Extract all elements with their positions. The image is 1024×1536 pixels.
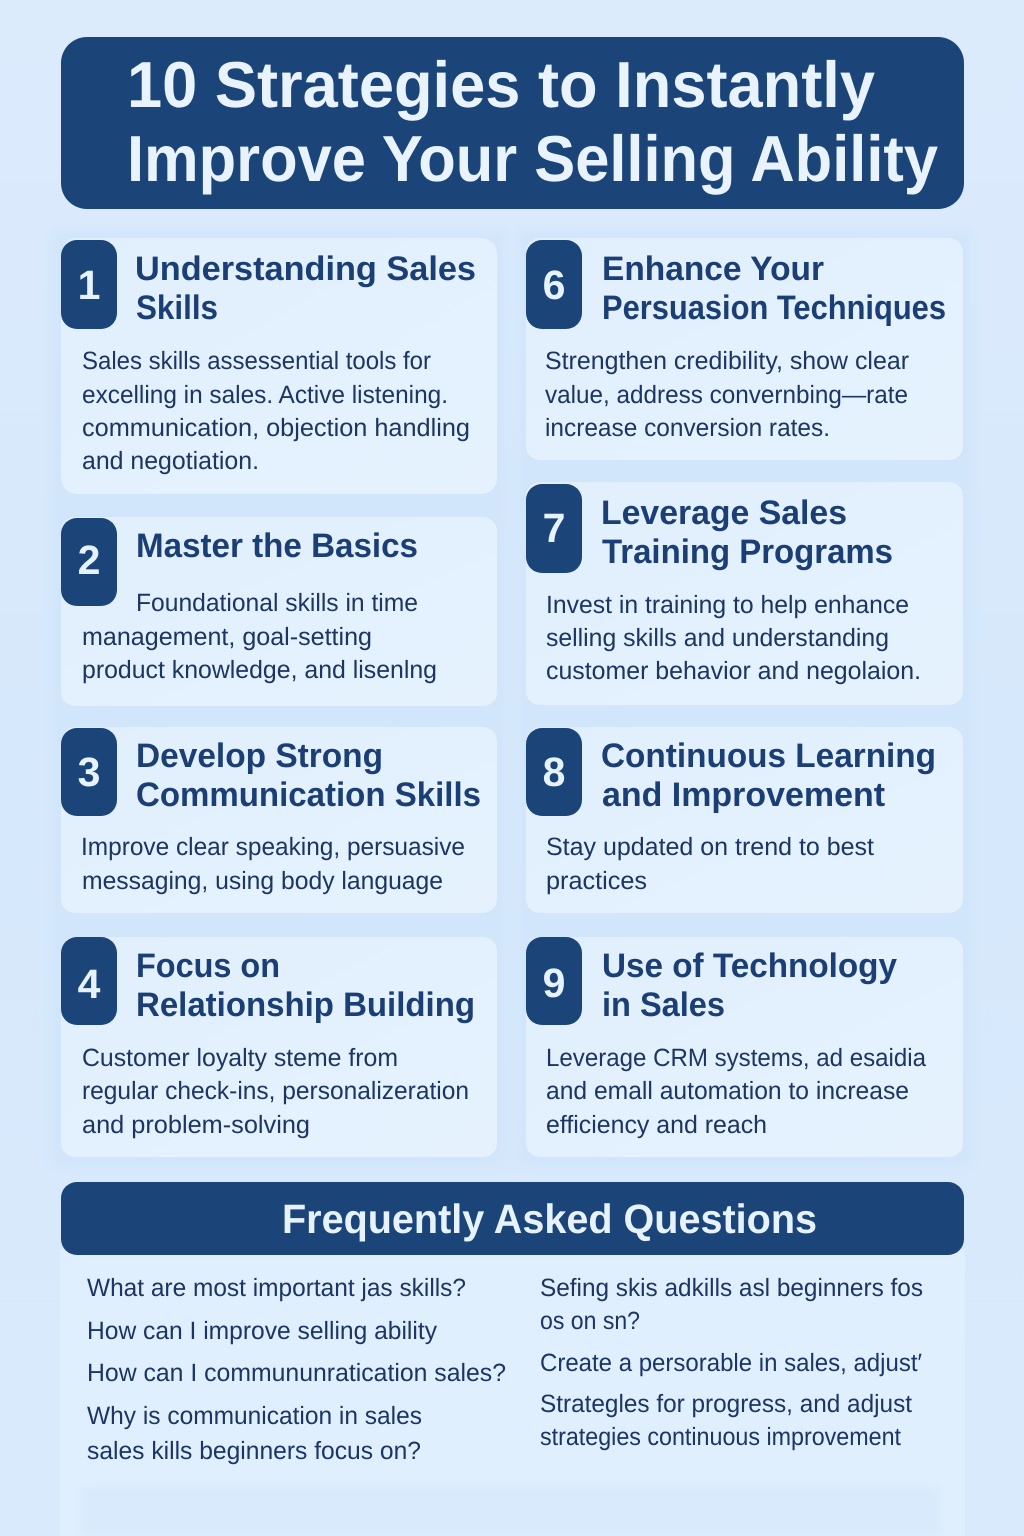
heading: strategy 9: Use of Technology [602,947,897,985]
panel: strategy 6 [526,238,963,460]
badge: number 3 [61,728,117,816]
text: strategy 1: excelling in sales. Active listening. [82,381,448,409]
FAQ questions [87,1274,506,1465]
heading: strategy 9: in Sales [602,986,725,1024]
text: strategy 6: value, address convernbing—rate [545,381,908,409]
panel: strategy 2 [61,517,497,706]
heading: strategy 9 [602,947,897,1024]
title: Improve Your Selling Ability [127,122,938,195]
text: strategy 7: Invest in training to help enhance [546,591,909,619]
text: strategy 7: selling skills and understanding [546,624,889,652]
text: strategy 9: efficiency and reach [546,1111,767,1139]
text: strategy 8: Stay updated on trend to best [546,833,874,861]
heading: strategy 3: Communication Skills [136,776,481,814]
heading: strategy 3: Develop Strong [136,737,383,775]
text: strategy 2: management, goal-setting [82,623,372,651]
heading: strategy 1 [135,250,476,327]
text: strategy 8 [546,833,874,895]
heading: strategy 4: Focus on [136,947,280,985]
text: strategy 2: Foundational skills in time [136,589,418,617]
badge: number 1: 1 [78,262,100,308]
heading: strategy 1: Skills [136,289,218,327]
FAQ answers [540,1274,923,1451]
heading: strategy 7: Training Programs [602,533,893,571]
text: strategy 1 [82,347,470,475]
FAQ answers: strategies continuous improvement [540,1423,901,1451]
title banner [61,37,964,209]
FAQ questions: What are most important jas skills? [87,1274,466,1302]
panel: strategy 3 [61,727,497,913]
text: strategy 2: product knowledge, and lisenlng [82,656,437,684]
badge: number 6 [526,240,582,329]
text: strategy 6 [545,347,909,442]
FAQ questions: How can I improve selling ability [87,1317,437,1345]
text: strategy 6: Strengthen credibility, show clear [545,347,909,375]
heading: strategy 6: Enhance Your [602,250,824,288]
badge: number 1 [61,240,117,329]
FAQ answers: Create a persorable in sales, adjust′ [540,1349,922,1377]
heading: strategy 4 [136,947,475,1024]
text: strategy 3: messaging, using body language [82,867,443,895]
heading: strategy 6 [602,250,946,327]
text: strategy 9: and emall automation to increase [546,1077,909,1105]
heading: strategy 8: Continuous Learning [601,737,936,775]
FAQ header bar [61,1182,964,1255]
heading: strategy 6: Persuasion Techniques [602,289,946,327]
heading: strategy 7 [601,494,893,571]
badge: number 3: 3 [78,749,100,795]
badge: number 9 [526,937,582,1025]
FAQ heading: Frequently Asked Questions [282,1196,817,1242]
badge: number 7: 7 [543,505,565,551]
panel: strategy 9 [526,937,963,1157]
text: strategy 2 [82,589,437,684]
text: strategy 1: communication, objection handling [82,414,470,442]
panel: strategy 4 [61,937,497,1157]
badge: number 8 [526,728,582,816]
text: strategy 1: and negotiation. [82,447,259,475]
text: strategy 7: customer behavior and negolaion. [546,657,921,685]
text: strategy 1: Sales skills assessential tools for [82,347,431,375]
badge: number 6: 6 [543,262,565,308]
panel: strategy 1 [61,238,497,494]
heading: strategy 8: and Improvement [602,776,885,814]
title: 10 Strategies to Instantly [127,48,875,121]
badge: number 2: 2 [78,537,100,583]
FAQ answers: Sefing skis adkills asl beginners fos [540,1274,923,1302]
heading: strategy 1: Understanding Sales [135,250,476,288]
FAQ questions: sales kills beginners focus on? [87,1437,421,1465]
text: strategy 9: Leverage CRM systems, ad esaidia [546,1044,926,1072]
panel: strategy 8 [526,727,963,913]
text: strategy 8: practices [546,867,647,895]
text: strategy 3: Improve clear speaking, persuasive [81,833,465,861]
title [127,48,938,195]
text: strategy 4: Customer loyalty steme from [82,1044,398,1072]
heading: strategy 3 [136,737,481,814]
text: strategy 6: increase conversion rates. [545,414,830,442]
FAQ questions: How can I commununratication sales? [87,1359,506,1387]
panel: FAQ [60,1182,965,1536]
text: strategy 4 [82,1044,469,1139]
heading: strategy 2: Master the Basics [136,527,418,565]
badge: number 9: 9 [543,960,565,1006]
heading: strategy 8 [601,737,936,814]
badge: number 7 [526,484,582,573]
badge: number 8: 8 [543,749,565,795]
badge: number 4: 4 [78,961,101,1007]
FAQ questions: Why is communication in sales [87,1402,422,1430]
FAQ answers: Strategles for progress, and adjust [540,1390,912,1418]
text: strategy 9 [546,1044,926,1139]
badge: number 2 [61,518,117,606]
heading: strategy 4: Relationship Building [136,986,475,1024]
heading: strategy 7: Leverage Sales [601,494,847,532]
FAQ answers: os on sn? [540,1307,640,1335]
panel: strategy 7 [526,482,963,705]
text: strategy 3 [81,833,465,895]
text: strategy 7 [546,591,921,685]
text: strategy 4: regular check-ins, personalizeration [82,1077,469,1105]
text: strategy 4: and problem-solving [82,1111,310,1139]
badge: number 4 [61,937,117,1025]
